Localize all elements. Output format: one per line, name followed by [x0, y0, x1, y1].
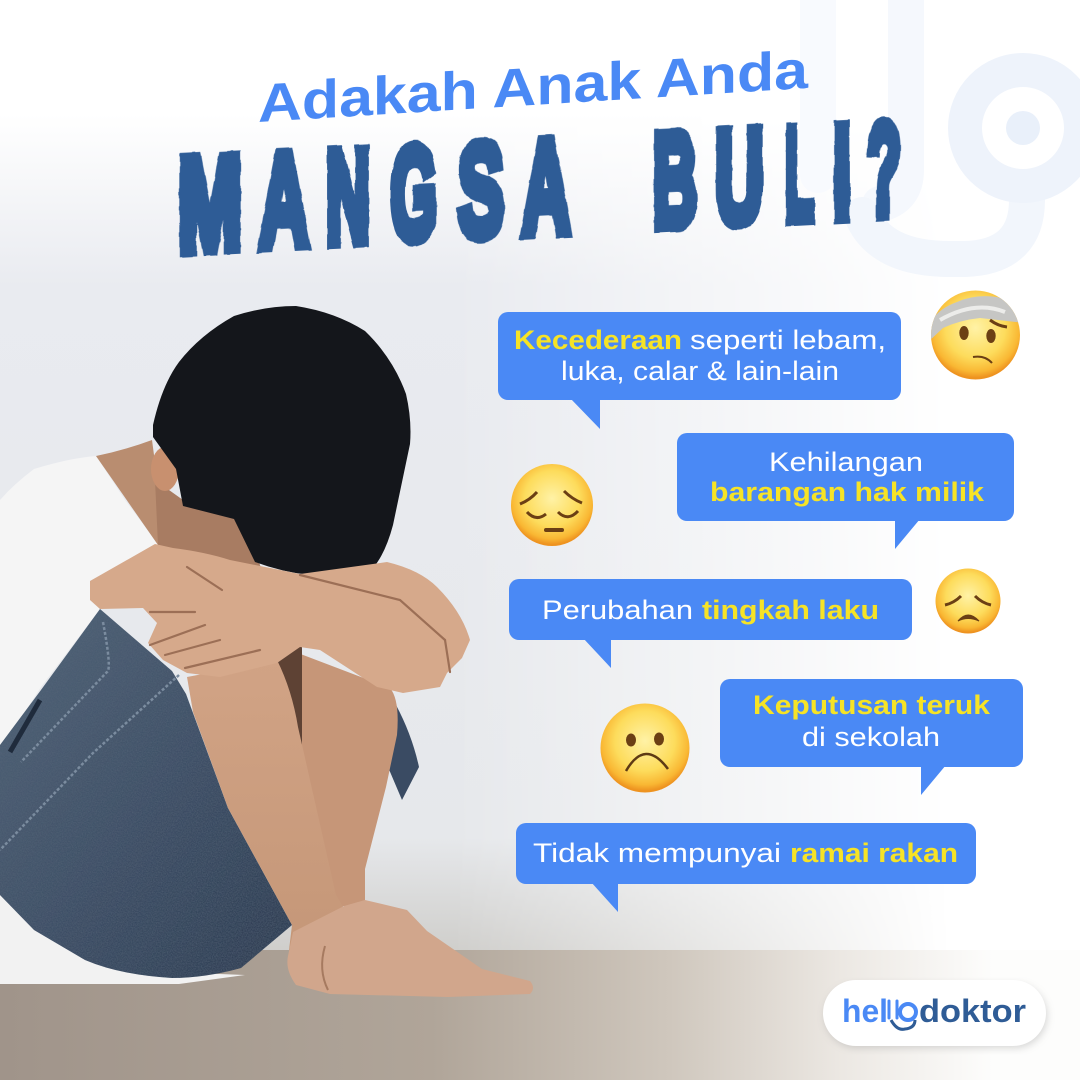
speech bubble: Kecederaan: seperti lebam, — [690, 325, 886, 355]
boy's shirt — [0, 456, 158, 750]
title: MANGSA BULI?: A — [259, 124, 309, 275]
title: MANGSA BULI?: S — [458, 114, 504, 265]
infographic canvas: ? — [867, 94, 901, 244]
emoji: bandaged face — [928, 290, 1025, 380]
speech bubble: Perubahan tingkah laku: Perubahan — [542, 595, 693, 625]
foot crease — [322, 946, 328, 990]
boy's arms and hands — [90, 544, 470, 693]
boy's far shorts — [385, 705, 419, 800]
boy's hair — [153, 306, 410, 576]
boy's lower shirt hem — [0, 895, 245, 984]
speech bubble: Kehilangan barangan hak milik: barangan hak milik — [710, 477, 985, 507]
photo: sad boy sitting hugging his knees — [0, 306, 533, 997]
speech bubble: Keputusan teruk di sekolah: Keputusan teruk — [753, 690, 991, 720]
title: MANGSA BULI?: M — [178, 128, 242, 279]
finger lines — [150, 567, 450, 672]
title: MANGSA BULI?: N — [326, 121, 370, 271]
speech bubble: Tidak mempunyai ramai rakan — [516, 823, 976, 912]
speech bubble: Kecederaan: Kecederaan — [514, 325, 682, 355]
watermark: stethoscope — [818, 0, 1080, 259]
title: MANGSA BULI?: A — [522, 111, 570, 261]
boy's near leg — [187, 660, 344, 950]
boy's shorts — [0, 609, 292, 978]
title: MANGSA BULI? — [178, 94, 901, 279]
speech bubble: Keputusan teruk di sekolah — [720, 679, 1023, 795]
title: MANGSA BULI?: I — [833, 97, 851, 245]
boy's neck — [96, 440, 160, 545]
subtitle: Adakah Anak Anda: Adakah Anak Anda — [258, 40, 809, 134]
boy's foot — [287, 900, 533, 997]
title: MANGSA BULI?: U — [715, 101, 764, 252]
title: MANGSA BULI?: L — [785, 99, 814, 248]
speech bubble: Kehilangan barangan hak milik — [677, 433, 1014, 549]
title: MANGSA BULI?: B — [653, 105, 697, 255]
speech bubble: Keputusan teruk di sekolah: di sekolah — [802, 722, 940, 752]
dark gap between legs — [272, 645, 302, 760]
speech bubble: Kecederaan — [498, 312, 901, 429]
boy's ear — [151, 447, 179, 491]
title: MANGSA BULI?: G — [391, 118, 437, 268]
logo: hellodoktor: doktor — [919, 993, 1026, 1029]
emoji: disappointed face — [936, 568, 1000, 634]
speech bubble: Tidak mempunyai ramai rakan: ramai rakan — [790, 838, 958, 868]
emoji: pensive face — [511, 464, 593, 546]
boy's face shadow — [155, 480, 262, 570]
speech bubble: Kehilangan barangan hak milik: Kehilangan — [769, 447, 923, 477]
logo: hellodoktor: hel — [842, 993, 888, 1029]
speech bubble: Tidak mempunyai ramai rakan: Tidak mempunyai — [533, 838, 781, 868]
boy's far leg — [290, 650, 398, 906]
emoji: frowning face — [600, 704, 690, 792]
background: wall and floor — [0, 177, 962, 1080]
logo: hellodoktor — [823, 980, 1047, 1048]
speech bubble: Kecederaan: luka, calar & lain-lain — [561, 356, 839, 386]
speech bubble: Perubahan tingkah laku: tingkah laku — [702, 595, 879, 625]
shorts seams and pocket — [0, 622, 179, 850]
speech bubble: Perubahan tingkah laku — [509, 579, 912, 668]
